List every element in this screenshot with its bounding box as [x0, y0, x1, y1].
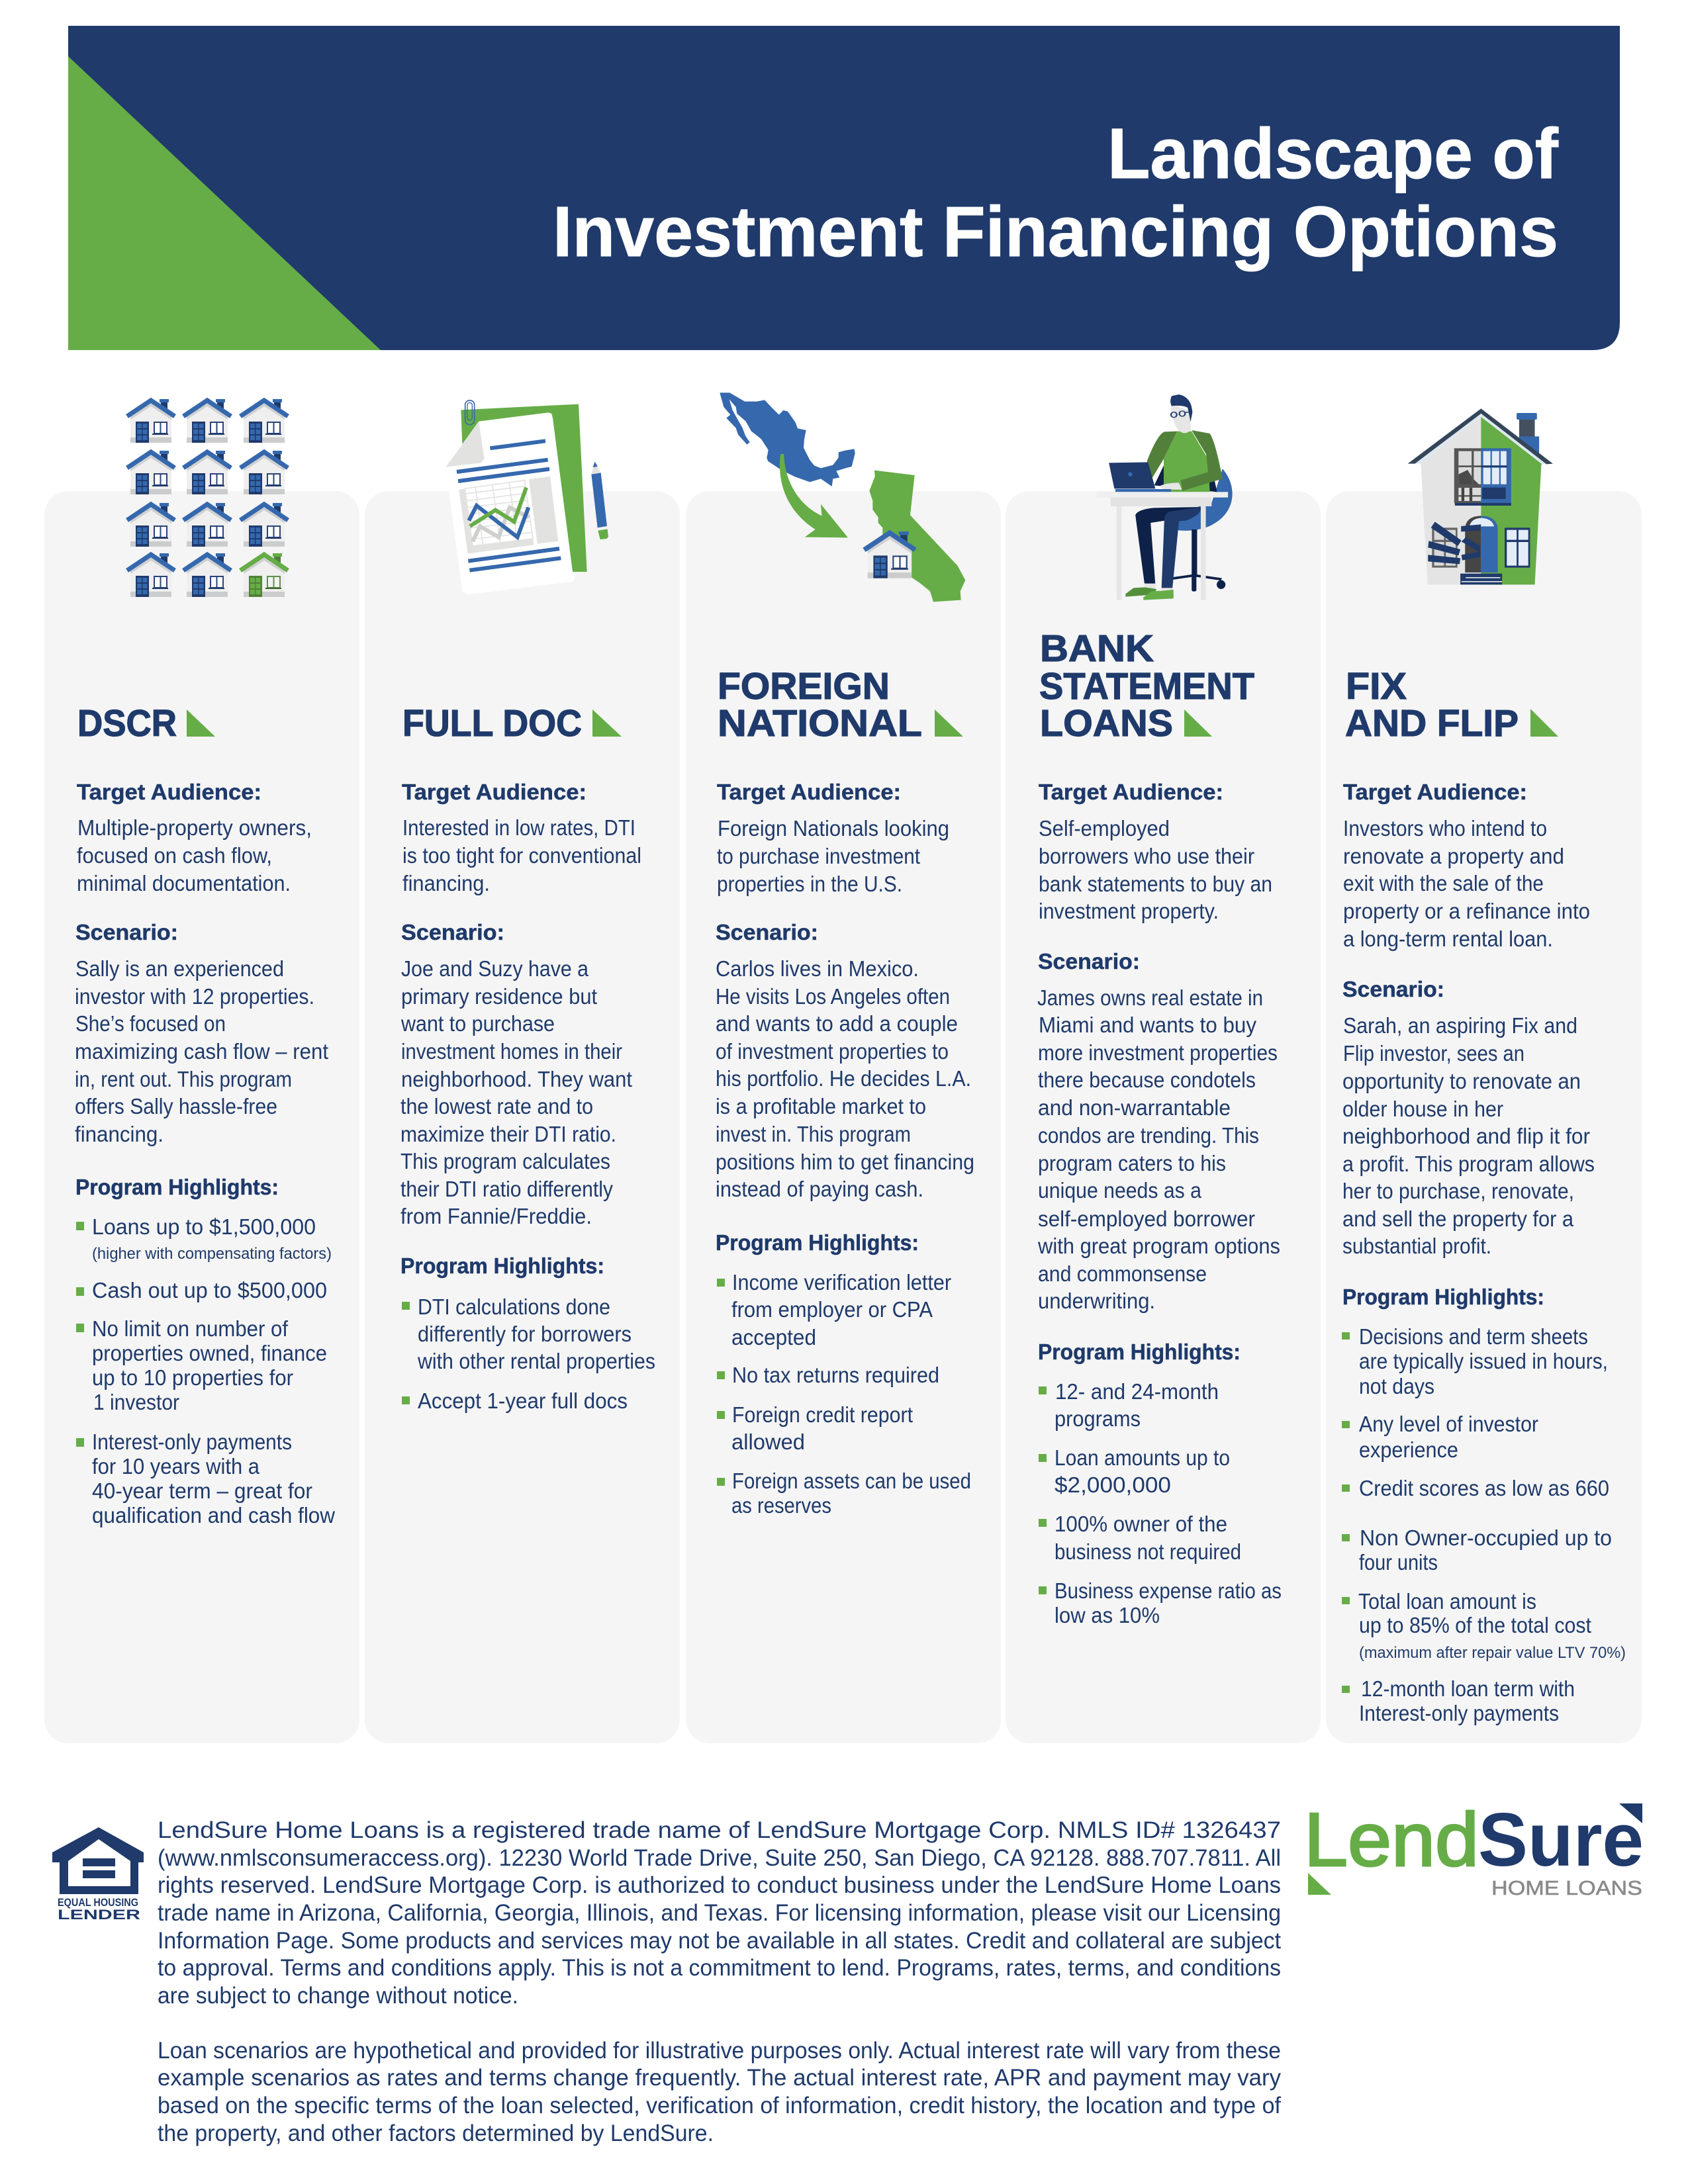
target audience: Self-employed — [1039, 816, 1170, 841]
scenario: of investment properties to — [716, 1039, 949, 1064]
scenario: She’s focused on — [75, 1011, 226, 1036]
panel: Bank Statement Loans — [1006, 394, 1321, 1743]
scenario: self-employed borrower — [1038, 1206, 1255, 1231]
program highlights: 40-year term – great for — [92, 1479, 312, 1503]
scenario: opportunity to renovate an — [1342, 1069, 1581, 1093]
target audience: Target Audience: — [1039, 780, 1223, 804]
program highlights: Any level of investor — [1359, 1412, 1538, 1436]
scenario: from Fannie/Freddie. — [400, 1204, 592, 1228]
icon: equal housing lender: EQUAL HOUSING — [58, 1896, 138, 1909]
scenario: He visits Los Angeles often — [716, 984, 950, 1009]
title — [553, 113, 1559, 271]
heading: Foreign National: NATIONAL — [718, 702, 922, 745]
program highlights: Program Highlights: — [400, 1253, 604, 1278]
heading: Foreign National: FOREIGN — [718, 665, 890, 707]
scenario: primary residence but — [401, 984, 597, 1009]
target audience: minimal documentation. — [77, 871, 291, 895]
disclosure text: (www.nmlsconsumeraccess.org). 12230 World Trade Drive, Suite 250, San Diego, CA 92128. 888.707.7811. All — [158, 1845, 1281, 1871]
program highlights: Program Highlights: — [75, 1175, 279, 1199]
disclosure text: LendSure Home Loans is a registered trade name of LendSure Mortgage Corp. NMLS ID# 1326437 — [158, 1817, 1281, 1843]
program highlights: four units — [1359, 1550, 1438, 1574]
program highlights: 100% owner of the — [1055, 1512, 1227, 1536]
scenario: Scenario: — [716, 920, 818, 944]
scenario: Sally is an experienced — [75, 956, 284, 981]
scenario: is a profitable market to — [716, 1094, 926, 1118]
program highlights: (higher with compensating factors) — [92, 1245, 332, 1263]
target audience: Interested in low rates, DTI — [402, 815, 635, 840]
program highlights: low as 10% — [1055, 1603, 1160, 1627]
scenario: Carlos lives in Mexico. — [716, 956, 919, 981]
panel: Fix and Flip — [1326, 408, 1642, 1743]
scenario: Scenario: — [75, 920, 178, 944]
program highlights: differently for borrowers — [418, 1322, 632, 1346]
target audience — [1343, 780, 1590, 951]
target audience — [717, 780, 949, 896]
program highlights: (maximum after repair value LTV 70%) — [1359, 1644, 1626, 1662]
scenario: his portfolio. He decides L.A. — [716, 1066, 971, 1091]
scenario: neighborhood and flip it for — [1342, 1124, 1590, 1148]
logo: LendSure Home Loans: Lend — [1304, 1798, 1479, 1882]
program highlights: up to 85% of the total cost — [1359, 1613, 1591, 1637]
program highlights: qualification and cash flow — [92, 1503, 335, 1527]
heading: DSCR: DSCR — [77, 702, 177, 745]
disclosure text: Information Page. Some products and services may not be available in all states. Credit and collateral are subject — [158, 1928, 1281, 1954]
scenario: there because condotels — [1038, 1068, 1256, 1092]
target audience: a long-term rental loan. — [1343, 927, 1553, 951]
heading: Bank Statement Loans: STATEMENT — [1039, 665, 1254, 707]
scenario: underwriting. — [1038, 1289, 1155, 1313]
program highlights: Credit scores as low as 660 — [1359, 1476, 1609, 1500]
target audience — [1039, 780, 1272, 923]
heading: Fix and Flip — [1345, 665, 1558, 745]
program highlights: accepted — [731, 1325, 816, 1349]
program highlights: Program Highlights: — [716, 1230, 919, 1255]
disclosure text: trade name in Arizona, California, Georgia, Illinois, and Texas. For licensing information, please visit our Licensing — [158, 1900, 1281, 1926]
program highlights: 1 investor — [93, 1390, 179, 1414]
program highlights: DTI calculations done — [418, 1295, 610, 1319]
program highlights: Loan amounts up to — [1055, 1445, 1230, 1470]
scenario: a profit. This program allows — [1342, 1152, 1595, 1176]
scenario: older house in her — [1342, 1097, 1503, 1121]
program highlights: with other rental properties — [417, 1349, 655, 1373]
icon: equal housing lender — [52, 1827, 144, 1923]
scenario: unique needs as a — [1038, 1178, 1202, 1203]
scenario: maximize their DTI ratio. — [400, 1122, 616, 1146]
program highlights: Program Highlights: — [1038, 1340, 1241, 1364]
program highlights: Total loan amount is — [1358, 1589, 1536, 1614]
scenario — [716, 920, 974, 1201]
program highlights — [716, 1230, 971, 1518]
program highlights: Cash out up to $500,000 — [92, 1278, 327, 1302]
program highlights: are typically issued in hours, — [1359, 1349, 1608, 1373]
target audience: Multiple-property owners, — [77, 815, 312, 840]
program highlights: 12-month loan term with — [1361, 1676, 1575, 1701]
icon: document and pencil — [445, 400, 608, 594]
program highlights: No tax returns required — [732, 1363, 939, 1387]
logo: LendSure Home Loans: HOME LOANS — [1491, 1876, 1642, 1899]
scenario: positions him to get financing — [716, 1150, 974, 1174]
heading: Fix and Flip: AND FLIP — [1345, 702, 1519, 745]
icon: grid of houses — [127, 399, 288, 597]
target audience: is too tight for conventional — [402, 843, 641, 868]
target audience: bank statements to buy an — [1039, 872, 1272, 896]
program highlights: business not required — [1055, 1539, 1241, 1564]
program highlights: Foreign credit report — [732, 1402, 913, 1427]
scenario: Scenario: — [1342, 977, 1444, 1001]
program highlights: Non Owner-occupied up to — [1360, 1525, 1612, 1550]
disclosure text: rights reserved. LendSure Mortgage Corp. is authorized to conduct business under the LendSure Home Loans — [158, 1872, 1281, 1898]
scenario: and commonsense — [1038, 1261, 1207, 1286]
program highlights: not days — [1359, 1374, 1434, 1398]
disclosure text: are subject to change without notice. — [158, 1983, 518, 2009]
scenario: program caters to his — [1038, 1151, 1226, 1175]
icon: Mexico to California map — [720, 392, 965, 602]
heading: Bank Statement Loans — [1039, 627, 1254, 745]
program highlights: properties owned, finance — [92, 1341, 327, 1365]
program highlights: Loans up to $1,500,000 — [92, 1214, 316, 1239]
program highlights: Foreign assets can be used — [732, 1469, 971, 1493]
scenario: Flip investor, sees an — [1343, 1041, 1524, 1066]
scenario: maximizing cash flow – rent — [75, 1039, 328, 1064]
target audience — [77, 780, 312, 895]
target audience: to purchase investment — [717, 844, 920, 868]
target audience: borrowers who use their — [1039, 844, 1254, 868]
scenario: condos are trending. This — [1038, 1123, 1259, 1148]
scenario: and wants to add a couple — [716, 1011, 958, 1036]
icon: half renovated house — [1408, 408, 1553, 584]
panel: Full Doc — [365, 400, 680, 1743]
logo: LendSure Home Loans: Sure — [1478, 1798, 1644, 1882]
target audience: properties in the U.S. — [717, 872, 902, 896]
scenario: James owns real estate in — [1037, 985, 1263, 1010]
program highlights: Decisions and term sheets — [1359, 1324, 1588, 1349]
scenario — [75, 920, 328, 1146]
scenario: invest in. This program — [716, 1122, 911, 1146]
target audience — [402, 780, 641, 895]
program highlights: No limit on number of — [92, 1316, 289, 1341]
target audience: exit with the sale of the — [1343, 871, 1544, 895]
program highlights: Program Highlights: — [1342, 1285, 1544, 1309]
disclosure text: the property, and other factors determined by LendSure. — [158, 2120, 714, 2146]
scenario: neighborhood. They want — [401, 1067, 632, 1091]
program highlights: for 10 years with a — [92, 1454, 260, 1479]
program highlights: programs — [1055, 1406, 1141, 1431]
scenario: investor with 12 properties. — [75, 984, 314, 1009]
target audience: Investors who intend to — [1343, 816, 1547, 841]
target audience: Target Audience: — [1343, 780, 1527, 804]
target audience: property or a refinance into — [1343, 899, 1590, 923]
disclosure text: example scenarios as rates and terms change frequently. The actual interest rate, APR and payment may vary — [158, 2065, 1281, 2091]
program highlights: Accept 1-year full docs — [418, 1388, 628, 1413]
icon: equal housing lender: LENDER — [58, 1907, 140, 1923]
scenario: offers Sally hassle-free — [75, 1094, 277, 1118]
title: Landscape of — [1107, 113, 1559, 193]
scenario: in, rent out. This program — [75, 1067, 292, 1091]
scenario: Joe and Suzy have a — [401, 956, 589, 981]
program highlights: experience — [1359, 1437, 1458, 1462]
program highlights: $2,000,000 — [1055, 1473, 1171, 1497]
program highlights — [75, 1175, 335, 1527]
disclosure text: to approval. Terms and conditions apply. This is not a commitment to lend. Programs, rates, terms, and conditions — [158, 1955, 1281, 1981]
program highlights: Interest-only payments — [92, 1430, 292, 1454]
scenario: investment homes in their — [401, 1039, 622, 1064]
scenario — [400, 920, 632, 1228]
target audience: renovate a property and — [1343, 844, 1564, 868]
scenario: Scenario: — [1038, 949, 1140, 974]
scenario: and non-warrantable — [1038, 1095, 1231, 1120]
disclosure text: based on the specific terms of the loan selected, verification of information, credit history, the location and type of — [158, 2093, 1281, 2118]
heading: Bank Statement Loans: BANK — [1040, 627, 1154, 670]
program highlights: allowed — [731, 1430, 805, 1454]
target audience: investment property. — [1039, 899, 1219, 923]
heading: Fix and Flip: FIX — [1346, 665, 1407, 707]
scenario: financing. — [75, 1122, 164, 1146]
target audience: Target Audience: — [402, 780, 586, 804]
program highlights — [1038, 1340, 1282, 1627]
scenario: instead of paying cash. — [716, 1177, 923, 1201]
scenario — [1342, 977, 1595, 1258]
scenario: with great program options — [1037, 1234, 1280, 1258]
scenario: more investment properties — [1038, 1040, 1278, 1065]
title: Investment Financing Options — [553, 191, 1558, 271]
target audience: Foreign Nationals looking — [718, 816, 949, 841]
target audience: Target Audience: — [77, 780, 261, 804]
scenario: her to purchase, renovate, — [1342, 1179, 1574, 1203]
icon: house on California — [864, 531, 915, 578]
icon: person at desk with laptop — [1096, 394, 1233, 600]
scenario: the lowest rate and to — [400, 1094, 593, 1118]
heading: Bank Statement Loans: LOANS — [1040, 702, 1173, 745]
scenario: substantial profit. — [1342, 1234, 1491, 1258]
scenario: Scenario: — [401, 920, 504, 944]
panel: Foreign National — [686, 392, 1001, 1743]
scenario: This program calculates — [400, 1149, 610, 1173]
program highlights: 12- and 24-month — [1055, 1379, 1219, 1404]
target audience: financing. — [402, 871, 490, 895]
program highlights: up to 10 properties for — [92, 1365, 293, 1390]
scenario — [1037, 949, 1280, 1313]
scenario: want to purchase — [400, 1011, 555, 1036]
target audience: focused on cash flow, — [77, 843, 272, 868]
logo: LendSure Home Loans — [1304, 1798, 1644, 1899]
scenario: and sell the property for a — [1342, 1206, 1574, 1231]
program highlights: from employer or CPA — [731, 1297, 933, 1322]
disclosure text — [158, 1817, 1281, 2146]
banner green triangle — [68, 56, 381, 350]
program highlights: Income verification letter — [732, 1270, 951, 1295]
scenario: their DTI ratio differently — [400, 1177, 613, 1201]
panel: DSCR — [44, 399, 359, 1743]
header banner — [68, 26, 1620, 350]
target audience: Target Audience: — [717, 780, 901, 804]
program highlights: as reserves — [731, 1493, 831, 1518]
heading: Foreign National — [718, 665, 963, 745]
program highlights: Business expense ratio as — [1055, 1578, 1282, 1603]
program highlights: Interest-only payments — [1359, 1701, 1559, 1725]
program highlights — [400, 1253, 655, 1413]
program highlights — [1342, 1285, 1626, 1725]
scenario: Sarah, an aspiring Fix and — [1343, 1013, 1577, 1038]
disclosure text: Loan scenarios are hypothetical and provided for illustrative purposes only. Actual interest rate will vary from these — [158, 2038, 1281, 2064]
heading: Full Doc: FULL DOC — [402, 702, 582, 745]
scenario: Miami and wants to buy — [1039, 1013, 1256, 1037]
